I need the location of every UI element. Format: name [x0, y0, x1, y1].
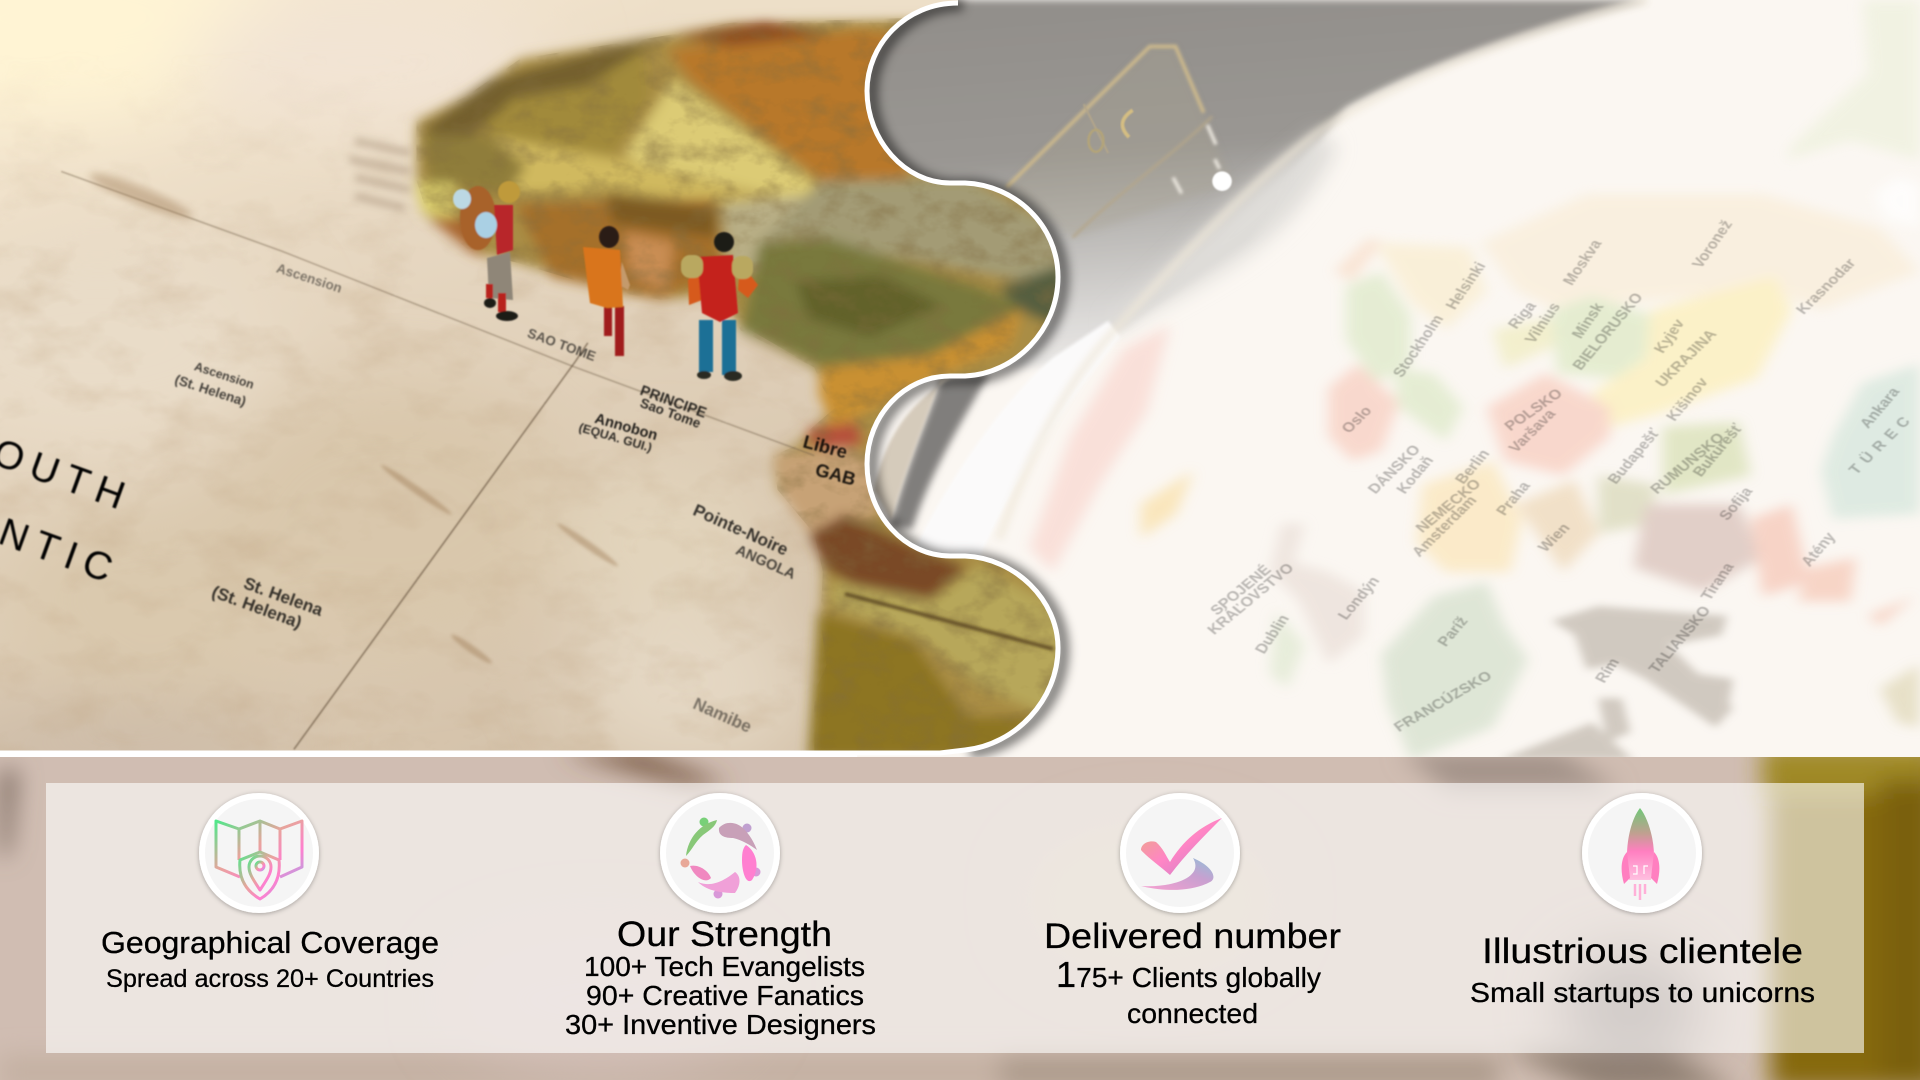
- printed map names: Ascension: [275, 260, 344, 296]
- gold bracket: [1007, 47, 1233, 238]
- tiny map names: Wien: [1535, 521, 1574, 555]
- tiny map names: Kodaň: [1393, 453, 1438, 497]
- pale globe map colours: [1029, 0, 1920, 760]
- description: Spread across 20+ Countries: [106, 965, 434, 993]
- line 1: 175+ Clients globally: [1056, 954, 1321, 995]
- printed map names: (St. Helena): [173, 372, 248, 409]
- tiny map names: Bukurešť: [1689, 421, 1747, 480]
- tiny map names: Budapešť: [1604, 425, 1664, 487]
- tiny map names: Krasnodar: [1793, 256, 1860, 318]
- tiny map names: Dublin: [1252, 612, 1293, 656]
- miniature figure 2: [583, 226, 630, 356]
- printed stains: [87, 167, 620, 666]
- tiny map names: Tirana: [1697, 560, 1738, 603]
- tiny map names: Moskva: [1560, 237, 1606, 288]
- tiny map names: Stockholm: [1390, 312, 1448, 380]
- printed map names: ANGOLA: [733, 543, 798, 583]
- tiny map names: TALIANSKO: [1645, 603, 1715, 676]
- tiny map names: Vilnius: [1522, 300, 1564, 346]
- printed map names: Pointe-Noire: [690, 500, 791, 559]
- printed map names: (EQUA. GUI.): [577, 420, 654, 455]
- bottom strip: blurred map background: [0, 745, 1920, 1080]
- white meridian band: [912, 321, 1120, 557]
- tiny map names: POLSKO: [1501, 386, 1566, 434]
- tiny map names: [1204, 218, 1919, 735]
- icon: ring of people: [663, 796, 777, 910]
- tiny map names: Kyjev: [1651, 316, 1689, 356]
- item: Illustrious clientele: [1470, 796, 1815, 1008]
- tiny map names: Atény: [1798, 529, 1840, 569]
- tiny map names: KRÁĽOVSTVO: [1204, 560, 1298, 638]
- tiny map names: Kišinov: [1663, 375, 1712, 424]
- photo: globe background: [857, 0, 1920, 760]
- cloth light variation: [0, 0, 808, 796]
- item: Geographical Coverage: [101, 796, 439, 993]
- printed map names: Annobon: [593, 411, 659, 444]
- land: [414, 12, 1078, 759]
- tiny map names: Riga: [1505, 298, 1541, 332]
- line 1: 100+ Tech Evangelists: [584, 951, 865, 982]
- printed map names: GAB: [813, 459, 858, 490]
- printed map names: Libre: [801, 431, 850, 462]
- printed map names: [0, 260, 858, 737]
- heading: Illustrious clientele: [1482, 932, 1803, 971]
- tiny map names: Rím: [1592, 656, 1623, 686]
- grey studio backdrop: [857, 0, 1647, 367]
- item: Our Strength: [565, 796, 876, 1040]
- tiny map names: BIELORUSKO: [1569, 290, 1647, 373]
- tiny map names: Helsinki: [1442, 259, 1490, 312]
- tiny map names: Voronež: [1689, 218, 1736, 271]
- globe meridian rim: [999, 0, 1647, 539]
- tiny map names: FRANCÚZSKO: [1390, 667, 1496, 735]
- printed map names: Namibe: [690, 693, 755, 737]
- tiny map names: Paríž: [1434, 614, 1472, 649]
- tiny map names: Ankara: [1856, 384, 1904, 431]
- icon: check mark: [1123, 796, 1237, 910]
- icon: rocket: [1585, 796, 1699, 910]
- photo: map with miniature travellers: [0, 0, 1078, 796]
- tiny map names: Berlin: [1452, 447, 1494, 487]
- mottled land texture: [404, 0, 1078, 759]
- printed map names: St. Helena: [241, 573, 326, 620]
- line 3: 30+ Inventive Designers: [565, 1009, 876, 1040]
- tiny map names: Varšava: [1505, 406, 1560, 456]
- tiny map names: Sofija: [1716, 484, 1757, 523]
- item: Delivered number: [1044, 796, 1341, 1029]
- heading: Geographical Coverage: [101, 925, 439, 960]
- tiny map names: SPOJENÉ: [1207, 562, 1275, 618]
- tiny map names: Minsk: [1568, 300, 1608, 341]
- tiny map names: Amsterdam: [1409, 493, 1481, 560]
- tiny map names: TÜREC: [1846, 410, 1919, 478]
- heading: Delivered number: [1044, 917, 1341, 956]
- tiny map names: RUMUNSKO: [1647, 430, 1729, 497]
- tiny map names: Praha: [1493, 478, 1535, 518]
- silver stand below bracket: [1131, 128, 1338, 327]
- tiny map names: NEMECKO: [1412, 476, 1485, 536]
- icon: map with location shield: [202, 796, 316, 910]
- tiny map names: UKRAJINA: [1652, 327, 1721, 390]
- dark ring of the stand: [890, 373, 989, 529]
- miniature figure 3: [681, 232, 758, 381]
- description: Small startups to unicorns: [1470, 977, 1815, 1008]
- printed map names: PRINCIPE: [638, 383, 709, 422]
- line 2: connected: [1127, 998, 1258, 1029]
- translucent info panel: [46, 783, 1864, 1053]
- curved shadow between the two photos: [872, 5, 1063, 752]
- italy dark peninsula: [1499, 606, 1733, 760]
- aged stains on the cloth: [0, 170, 802, 750]
- printed map names: Sao Tome: [638, 395, 703, 431]
- tiny map names: Oslo: [1338, 403, 1376, 436]
- printed map names: Ascension: [193, 359, 256, 392]
- line 2: 90+ Creative Fanatics: [586, 980, 864, 1011]
- printed map lines: [61, 171, 814, 749]
- white curved border: [0, 3, 1058, 753]
- printed map names: (St. Helena): [209, 581, 305, 632]
- tiny map names: Londýn: [1334, 574, 1384, 623]
- heading: Our Strength: [617, 915, 832, 954]
- blurred text column on the coast: [349, 141, 410, 208]
- miniature figure 1: [453, 181, 520, 321]
- tiny map names: DÁNSKO: [1365, 442, 1425, 497]
- printed map names: SAO TOME: [526, 325, 598, 364]
